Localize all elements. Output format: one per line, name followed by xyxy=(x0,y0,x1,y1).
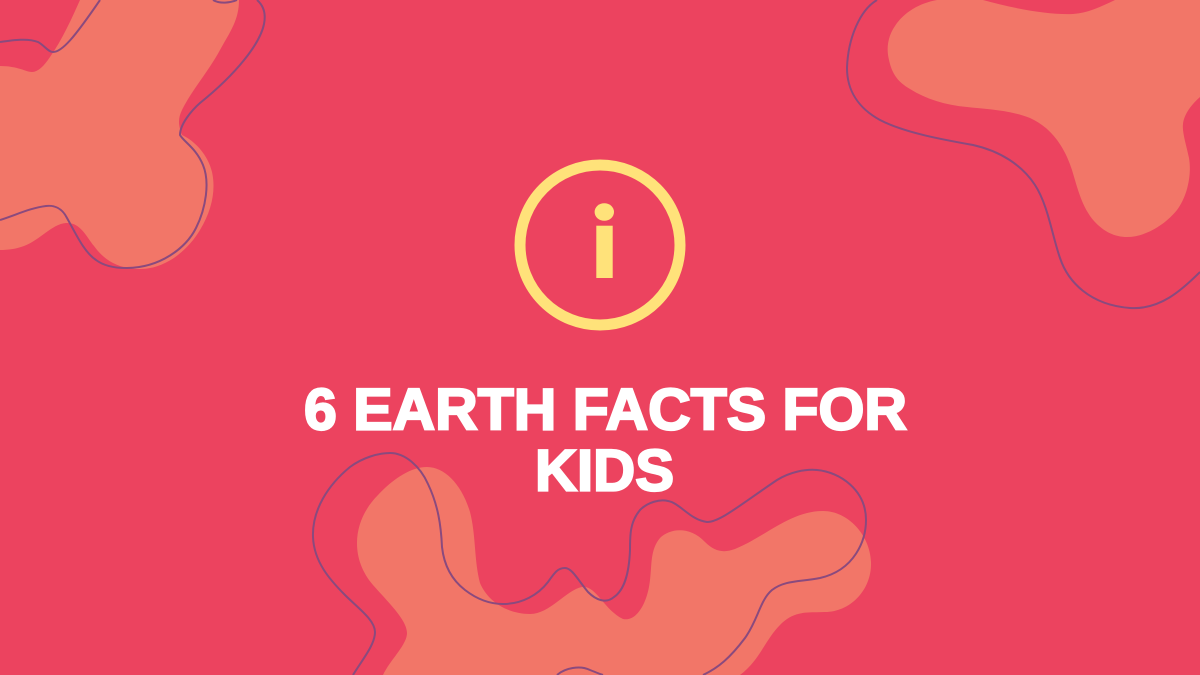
outline: top left xyxy=(0,0,265,268)
title: 6 EARTH FACTS FOR xyxy=(304,378,907,442)
icon: info circle xyxy=(520,165,680,325)
blob: top right xyxy=(888,0,1200,237)
blob: bottom xyxy=(357,467,871,675)
outline: bottom xyxy=(313,453,866,675)
blob: top left xyxy=(0,0,239,269)
title: KIDS xyxy=(535,438,674,504)
title xyxy=(304,378,907,504)
outline: top right xyxy=(847,0,1200,308)
